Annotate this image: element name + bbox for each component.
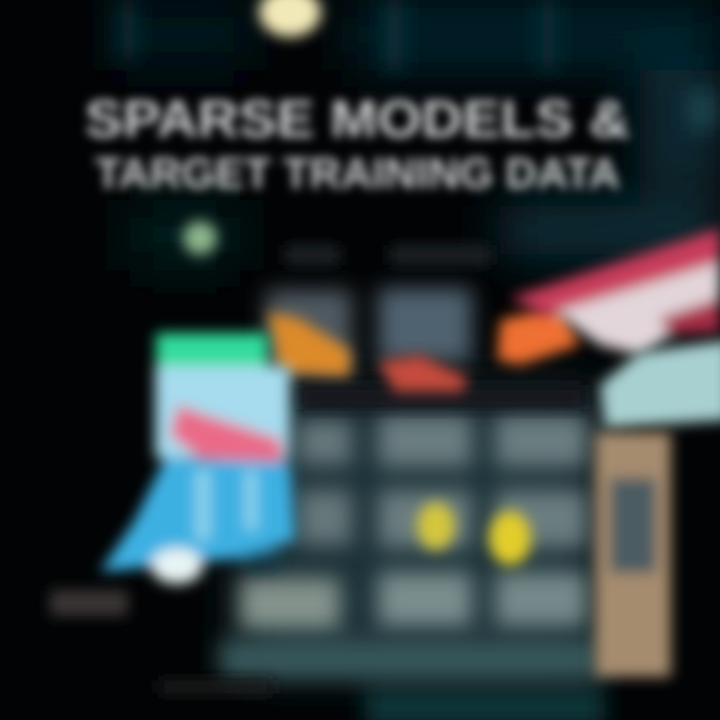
- table: dark header row: [300, 385, 585, 409]
- table: column 3: [495, 415, 587, 627]
- illustration: figure: [100, 333, 295, 584]
- blue skirt: [100, 458, 295, 572]
- table: column 2: [378, 288, 472, 627]
- dark foot: [242, 550, 282, 570]
- title: SPARSE MODELS &: [85, 90, 630, 149]
- skirt folds: [196, 470, 257, 540]
- gray block: caption: [50, 590, 273, 694]
- green collar: [156, 333, 268, 367]
- red accent: [378, 355, 468, 392]
- table background wash: [240, 390, 600, 670]
- accents in table: [268, 305, 580, 565]
- orange accent: [268, 312, 350, 376]
- panel: light teal block: [600, 340, 720, 428]
- banner: pink stripe: [510, 228, 720, 355]
- orange accent right: [497, 305, 580, 365]
- panel: table grid: [240, 288, 587, 630]
- table heading blur: [285, 245, 490, 265]
- table: column 1: [240, 290, 352, 630]
- yellow dots: [417, 502, 531, 565]
- icon: moon: [259, 0, 321, 37]
- white foot: [151, 548, 203, 584]
- title: [85, 90, 630, 198]
- background: teal night sky: [110, 0, 720, 270]
- icon: green dot: [183, 221, 217, 255]
- bottom teal band: [220, 640, 605, 720]
- background: sky streaks: [120, 0, 714, 130]
- light blue body: [155, 366, 290, 458]
- panel: tan column: [595, 432, 671, 677]
- title: TARGET TRAINING DATA: [95, 149, 620, 198]
- pink sash: [170, 405, 282, 464]
